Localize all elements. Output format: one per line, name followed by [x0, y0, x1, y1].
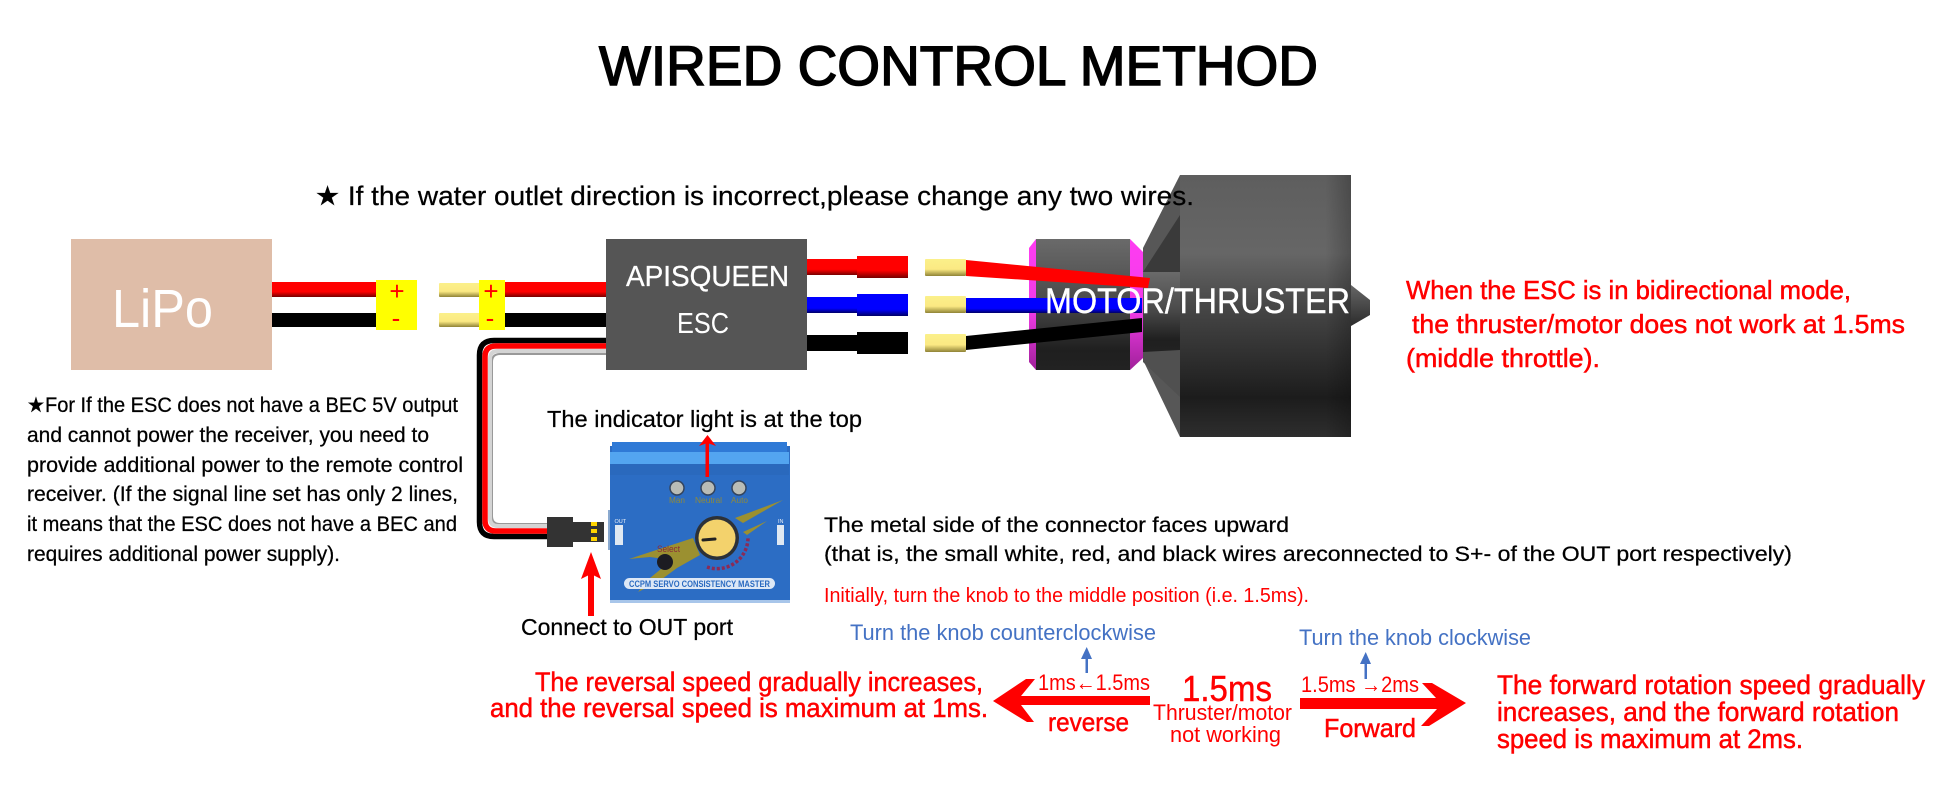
- indicator arrow: [699, 435, 716, 477]
- servo tester: OUT: [614, 519, 627, 525]
- indicator light label: The indicator light is at the top: [547, 406, 862, 432]
- servo connector: [547, 517, 604, 547]
- connect to OUT port label: Connect to OUT port: [521, 614, 734, 640]
- reversal text: and the reversal speed is maximum at 1ms.: [490, 693, 988, 723]
- BEC power note: requires additional power supply).: [27, 543, 340, 566]
- forward text: speed is maximum at 2ms.: [1497, 724, 1803, 754]
- BEC power note: receiver. (If the signal line set has only 2 lines,: [27, 483, 458, 506]
- note: water outlet direction: ★ If the water outlet direction is incorrect,please change any two wires.: [315, 181, 1194, 211]
- thruster: [1143, 175, 1370, 437]
- ESC box: APISQUEEN: [626, 261, 789, 293]
- signal wire to servo tester: [480, 340, 606, 536]
- center 1.5ms: not working: [1170, 722, 1281, 747]
- BEC power note: it means that the ESC does not have a BEC and: [27, 513, 457, 536]
- BEC power note: provide additional power to the remote control: [27, 454, 463, 477]
- servo tester: Man: [669, 496, 685, 505]
- counterclockwise label: Turn the knob counterclockwise: [850, 620, 1156, 645]
- center 1.5ms: 1.5ms: [1182, 668, 1272, 709]
- reverse label: reverse: [1048, 707, 1129, 737]
- blue arrow left: [1081, 647, 1092, 673]
- ESC power connector and wires: -: [486, 303, 494, 333]
- connector orientation note: The metal side of the connector faces upward: [824, 514, 1289, 537]
- battery wires and connector: [272, 276, 417, 333]
- BEC power note: ★For If the ESC does not have a BEC 5V output: [27, 394, 458, 417]
- servo tester: IN: [778, 519, 784, 525]
- motor/thruster label: MOTOR/THRUSTER: [1045, 282, 1350, 321]
- forward text: increases, and the forward rotation: [1497, 697, 1899, 727]
- bidirectional mode note: the thruster/motor does not work at 1.5ms: [1412, 309, 1905, 339]
- reverse arrow: [993, 679, 1150, 722]
- servo tester: Select: [657, 544, 680, 554]
- motor: [1029, 239, 1143, 370]
- LiPo battery: LiPo: [112, 279, 213, 339]
- battery wires and connector: -: [392, 303, 400, 333]
- bidirectional mode note: (middle throttle).: [1406, 343, 1600, 373]
- ESC box: ESC: [677, 308, 729, 340]
- blue arrow right: [1360, 652, 1371, 679]
- forward arrow: [1300, 683, 1466, 726]
- servo tester: Auto: [731, 496, 749, 505]
- clockwise label: Turn the knob clockwise: [1299, 625, 1531, 650]
- forward label: Forward: [1324, 713, 1416, 743]
- servo tester: Neutral: [695, 496, 722, 505]
- LiPo battery: [71, 239, 272, 370]
- battery wires and connector: +: [389, 276, 405, 306]
- connector orientation note: [824, 514, 1792, 566]
- ESC output wires: [807, 256, 908, 354]
- 1.5ms to 2ms label: 1.5ms →2ms: [1301, 672, 1419, 697]
- ESC box: [606, 239, 807, 370]
- bidirectional mode note: When the ESC is in bidirectional mode,: [1406, 275, 1851, 305]
- servo tester: [608, 442, 790, 603]
- forward text: The forward rotation speed gradually: [1497, 670, 1925, 700]
- reversal text: The reversal speed gradually increases,: [535, 667, 983, 697]
- BEC power note: [27, 394, 463, 566]
- forward text: [1497, 670, 1925, 754]
- reversal text: [490, 667, 988, 723]
- gold pins and motor wires: [925, 259, 1150, 352]
- ESC power connector and wires: +: [483, 276, 499, 306]
- connect arrow: [581, 552, 601, 616]
- 1ms to 1.5ms label: 1ms←1.5ms: [1038, 670, 1150, 695]
- center 1.5ms: [1153, 668, 1292, 747]
- servo tester: CCPM SERVO CONSISTENCY MASTER: [629, 579, 770, 589]
- initial position note: Initially, turn the knob to the middle position (i.e. 1.5ms).: [824, 585, 1309, 607]
- connector orientation note: (that is, the small white, red, and black wires areconnected to S+- of the OUT port respectively): [824, 543, 1792, 566]
- title: WIRED CONTROL METHOD: [599, 34, 1318, 97]
- bidirectional mode note: [1406, 275, 1905, 373]
- center 1.5ms: Thruster/motor: [1153, 700, 1292, 725]
- BEC power note: and cannot power the receiver, you need to: [27, 424, 429, 447]
- ESC power connector and wires: [439, 276, 606, 333]
